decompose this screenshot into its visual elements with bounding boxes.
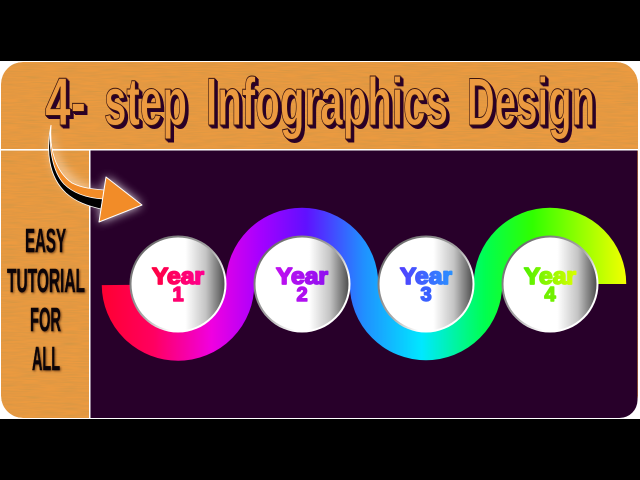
- step 2: year 2: 2: [296, 284, 308, 306]
- step 4: year 4: 4: [544, 284, 556, 306]
- step 1: year 1: Year: [152, 263, 204, 289]
- text: TUTORIAL: [7, 262, 85, 299]
- step 2: year 2: Year: [276, 263, 328, 289]
- step 3: year 3: 3: [420, 284, 432, 306]
- chart: serpentine ribbon: [116, 222, 612, 346]
- sidebar text: easy tutorial for all: FOR: [30, 301, 61, 338]
- step 2: year 2: [254, 236, 350, 332]
- step 1: year 1: [130, 236, 226, 332]
- title: 4-: [45, 64, 86, 140]
- sidebar text: easy tutorial for all: [7, 222, 85, 377]
- step 1: year 1: 1: [172, 284, 184, 306]
- step 4: year 4: Year: [524, 263, 576, 289]
- step 3: year 3: [378, 236, 474, 332]
- step 3: year 3: Year: [400, 263, 452, 289]
- step 4: year 4: [502, 236, 598, 332]
- icon: curved arrow: [49, 125, 142, 222]
- title: step: [104, 64, 187, 140]
- sidebar text: easy tutorial for all: EASY: [25, 222, 66, 259]
- title: Infographics: [206, 64, 448, 140]
- panel: wood frame: [1, 62, 638, 418]
- divider lines and dark panel: [0, 149, 639, 418]
- sidebar text: easy tutorial for all: ALL: [32, 340, 60, 377]
- title: [45, 64, 595, 140]
